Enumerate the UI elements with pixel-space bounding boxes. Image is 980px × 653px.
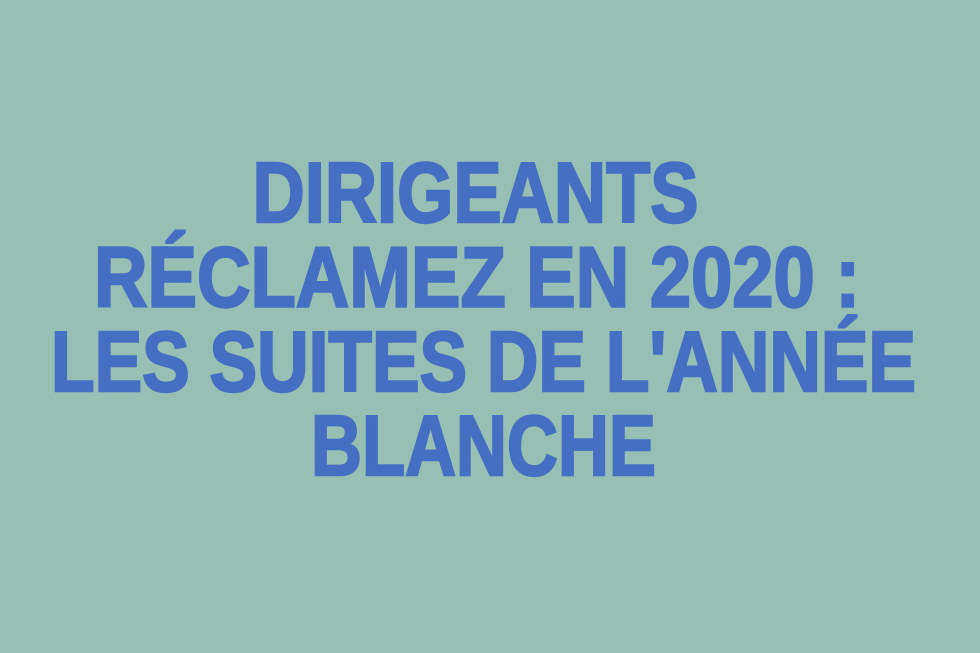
title: RÉCLAMEZ EN 2020 : [94,230,860,326]
title [51,146,916,494]
title: DIRIGEANTS [252,146,698,241]
title: BLANCHE [311,399,656,494]
